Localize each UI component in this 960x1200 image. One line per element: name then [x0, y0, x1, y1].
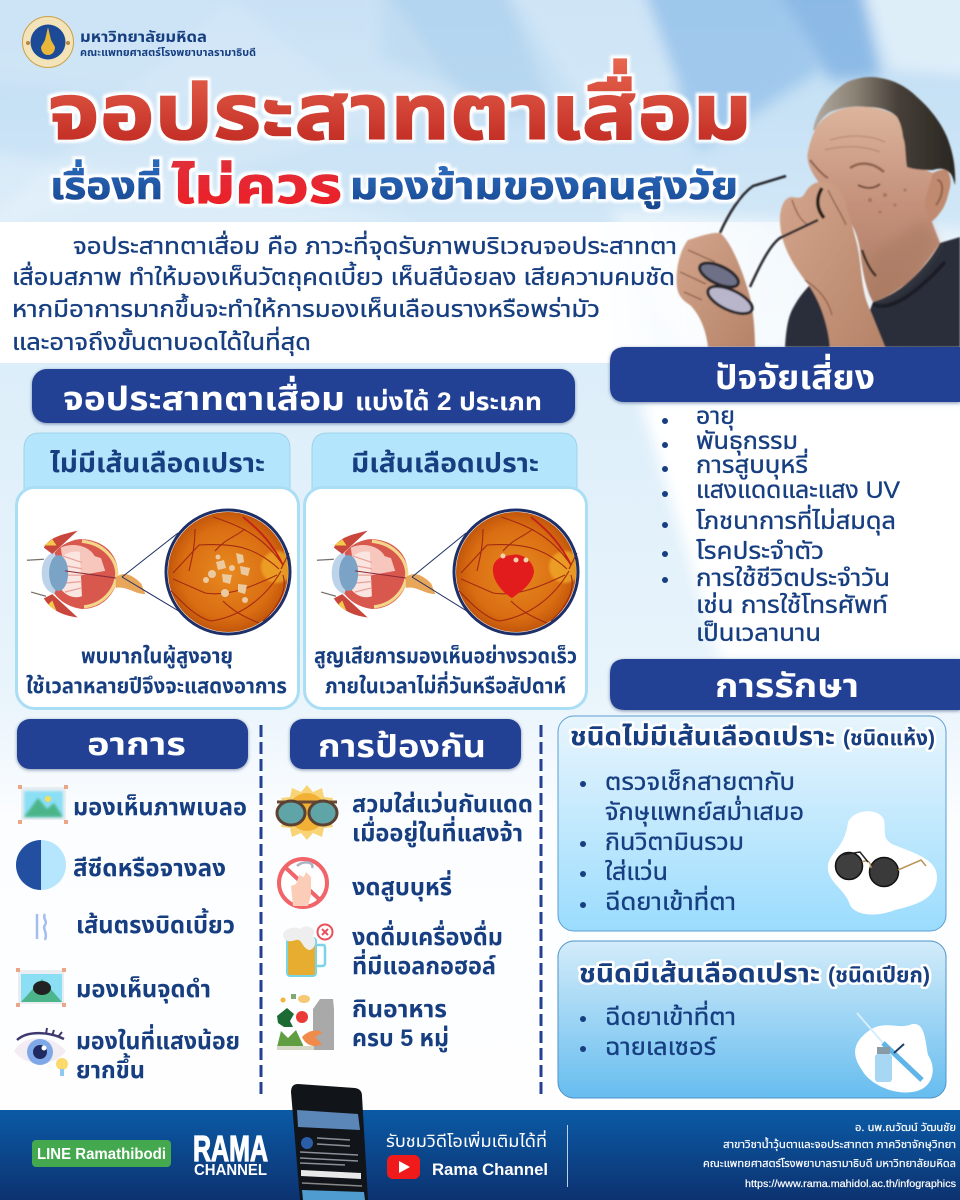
- subtitle: มองข้ามของคนสูงวัย: [350, 166, 738, 209]
- prevention: sunglasses: สวมใส่แว่นกันแดด: [352, 790, 533, 818]
- panel title: [579, 958, 930, 988]
- list: risk factors: โภชนาการที่ไม่สมดุล: [696, 504, 896, 536]
- panel title: (ชนิดแห้ง): [843, 727, 935, 750]
- phone mockup: [291, 1084, 368, 1200]
- panel title: (ชนิดเปียก): [828, 964, 930, 987]
- treatment list: ตรวจเช็กสายตากับ: [605, 768, 795, 796]
- zoom lines: [122, 533, 182, 613]
- prevention: no smoking: งดสูบบุหรี่: [352, 870, 452, 902]
- ear: [925, 170, 951, 223]
- symptom: blurry: มองเห็นภาพเบลอ: [73, 794, 247, 821]
- hair: [813, 77, 955, 185]
- prevention: balanced diet: ครบ 5 หมู่: [352, 1024, 449, 1053]
- list: risk factors: เป็นเวลานาน: [696, 620, 821, 647]
- panel: definition: [0, 222, 960, 363]
- icon: picture with black spot: [16, 968, 66, 1007]
- panel: definition: หากมีอาการมากขึ้นจะทำให้การมองเห็นเลือนรางหรือพร่ามัว: [12, 293, 600, 322]
- prevention: no alcohol: [352, 920, 503, 980]
- tab: [312, 433, 577, 490]
- caption: พบมากในผู้สูงอายุ: [81, 645, 233, 669]
- list: risk factors: การใช้ชีวิตประจำวัน: [696, 565, 890, 592]
- logo: RAMA Channel: [193, 1128, 268, 1179]
- zoom lines: [412, 533, 470, 613]
- credits: คณะแพทยศาสตร์โรงพยาบาลรามาธิบดี มหาวิทยาลัยมหิดล: [703, 1158, 956, 1170]
- icon: sun with sunglasses: [276, 785, 338, 840]
- heading: risk factors: [610, 347, 960, 402]
- treatment list: ใส่แว่น: [605, 858, 668, 886]
- treatment list: [580, 1000, 736, 1061]
- icon: balanced food: [277, 994, 334, 1050]
- heading: treatment: [610, 659, 960, 710]
- tab: มีเส้นเลือดเปราะ: [351, 448, 539, 478]
- icon: YouTube: [387, 1155, 420, 1179]
- heading: symptoms: อาการ: [87, 727, 186, 762]
- list: risk factors: โรคประจำตัว: [696, 538, 824, 565]
- treatment list: [580, 768, 804, 916]
- subtitle: [50, 158, 738, 214]
- heading: risk factors: ปัจจัยเสี่ยง: [715, 353, 875, 397]
- prevention: sunglasses: เมื่ออยู่ในที่แสงจ้า: [352, 816, 523, 848]
- panel: definition: จอประสาทตาเสื่อม คือ ภาวะที่จุดรับภาพบริเวณจอประสาทตา: [73, 230, 677, 260]
- hand holding glasses: [677, 233, 755, 347]
- heading: symptoms: [17, 719, 248, 769]
- symptom: low-light vision: [76, 1024, 240, 1084]
- panel: definition: และอาจถึงขั้นตาบอดได้ในที่สุด: [12, 326, 311, 356]
- icon: blurred picture: [18, 785, 68, 824]
- panel title: ชนิดไม่มีเส้นเลือดเปราะ: [570, 721, 835, 751]
- subtitle: ไม่ควร: [172, 158, 342, 214]
- icon: retina with drusen: [166, 510, 293, 634]
- symptom: pale colours: สีซีดหรือจางลง: [73, 855, 226, 882]
- list: risk factors: การสูบบุหรี่: [696, 448, 808, 480]
- symptom: black spot: มองเห็นจุดดำ: [76, 976, 211, 1004]
- emblem: [22, 16, 74, 68]
- glasses: [696, 176, 818, 319]
- symptom: distorted lines: เส้นตรงบิดเบี้ยว: [76, 908, 235, 939]
- prevention: no alcohol: งดดื่มเครื่องดื่ม: [352, 920, 503, 951]
- icon: eye anatomy: [317, 531, 435, 617]
- faculty name: คณะแพทยศาสตร์โรงพยาบาลรามาธิบดี: [80, 47, 256, 59]
- tab: [24, 433, 290, 490]
- icon: wavy lines: [37, 914, 46, 940]
- title: [48, 59, 752, 214]
- panel title: [570, 721, 935, 751]
- prevention: no alcohol: ที่มีแอลกอฮอล์: [352, 949, 496, 980]
- logo: RAMA Channel: CHANNEL: [194, 1162, 267, 1179]
- icon: no smoking: [279, 859, 327, 907]
- logo: Mahidol University: [22, 16, 256, 68]
- heading: types: [32, 369, 575, 423]
- treatment list: จักษุแพทย์สม่ำเสมอ: [605, 795, 804, 827]
- LINE button: LINE Ramathibodi: [37, 1146, 166, 1163]
- logo: RAMA Channel: RAMA: [193, 1128, 268, 1169]
- footer: [0, 1084, 960, 1200]
- list: risk factors: เช่น การใช้โทรศัพท์: [696, 591, 888, 619]
- treatment list: กินวิตามินรวม: [605, 829, 744, 856]
- credits: [703, 1122, 956, 1190]
- icon: eye anatomy: [27, 531, 145, 617]
- list: risk factors: พันธุกรรม: [696, 428, 798, 456]
- icon: half-coloured circle: [16, 840, 66, 890]
- main heading: จอประสาทตาเสื่อม: [48, 59, 752, 156]
- credits: https://www.rama.mahidol.ac.th/infographics: [745, 1178, 956, 1190]
- treatment list: ฉีดยาเข้าที่ตา: [605, 885, 736, 916]
- symptom: low-light vision: มองในที่แสงน้อย: [76, 1024, 240, 1055]
- heading: treatment: การรักษา: [715, 667, 859, 704]
- panel: dry treatment: [558, 716, 946, 931]
- LINE button: [32, 1140, 171, 1167]
- heading: prevention: การป้องกัน: [318, 729, 486, 764]
- prevention: balanced diet: กินอาหาร: [352, 996, 447, 1023]
- panel: dry type card: ใช้เวลาหลายปีจึงจะแสดงอาการ: [26, 675, 287, 698]
- shirt: [785, 237, 960, 347]
- icon: retina with bleeding: [454, 510, 581, 634]
- face and neck: [807, 107, 940, 302]
- hand on face: [780, 182, 885, 347]
- list: risk factors: อายุ: [696, 403, 735, 431]
- facial details: [810, 136, 885, 276]
- treatment list: ฉีดยาเข้าที่ตา: [605, 1000, 736, 1031]
- heading: types: จอประสาทตาเสื่อม: [63, 375, 345, 417]
- credits: อ. นพ.ณวัฒน์ วัฒนชัย: [855, 1122, 956, 1134]
- heading: types: แบ่งได้ 2 ประเภท: [355, 388, 542, 416]
- panel: dry type card: [16, 433, 298, 708]
- symptom: low-light vision: ยากขึ้น: [76, 1053, 145, 1084]
- photo: older man rubbing his eyes: [677, 77, 960, 347]
- treatment list: ฉายเลเซอร์: [605, 1034, 717, 1061]
- list: risk factors: [662, 403, 900, 647]
- heading: prevention: [290, 719, 521, 769]
- icon: sunglasses on blob: [828, 811, 937, 915]
- channel name: Rama Channel: [432, 1161, 548, 1179]
- panel: wet treatment: [558, 941, 946, 1098]
- icon: syringe and vial on blob: [855, 1013, 933, 1093]
- panel title: ชนิดมีเส้นเลือดเปราะ: [579, 958, 820, 988]
- panel: definition: เสื่อมสภาพ ทำให้มองเห็นวัตถุคดเบี้ยว เห็นสีน้อยลง เสียความคมชัด: [12, 261, 675, 291]
- credits: สาขาวิชาน้ำวุ้นตาและจอประสาทตา ภาควิชาจักษุวิทยา: [723, 1137, 956, 1151]
- panel: wet type card: ภายในเวลาไม่กี่วันหรือสัปดาห์: [325, 671, 566, 698]
- list: symptoms: [14, 785, 247, 1084]
- list: risk factors: แสงแดดและแสง UV: [696, 477, 900, 504]
- tab: ไม่มีเส้นเลือดเปราะ: [50, 448, 265, 478]
- university name: มหาวิทยาลัยมหิดล: [80, 29, 207, 46]
- prevention: balanced diet: [352, 996, 449, 1053]
- panel: wet type card: [304, 433, 586, 708]
- prevention: sunglasses: [352, 790, 533, 848]
- subtitle: เรื่องที่: [50, 159, 163, 208]
- list: prevention: [276, 785, 533, 1053]
- caption: สูญเสียการมองเห็นอย่างรวดเร็ว: [314, 645, 577, 669]
- icon: no alcohol: [283, 924, 332, 976]
- icon: eye with dim bulb: [14, 1028, 68, 1076]
- video prompt: รับชมวิดีโอเพิ่มเติมได้ที่: [386, 1130, 547, 1151]
